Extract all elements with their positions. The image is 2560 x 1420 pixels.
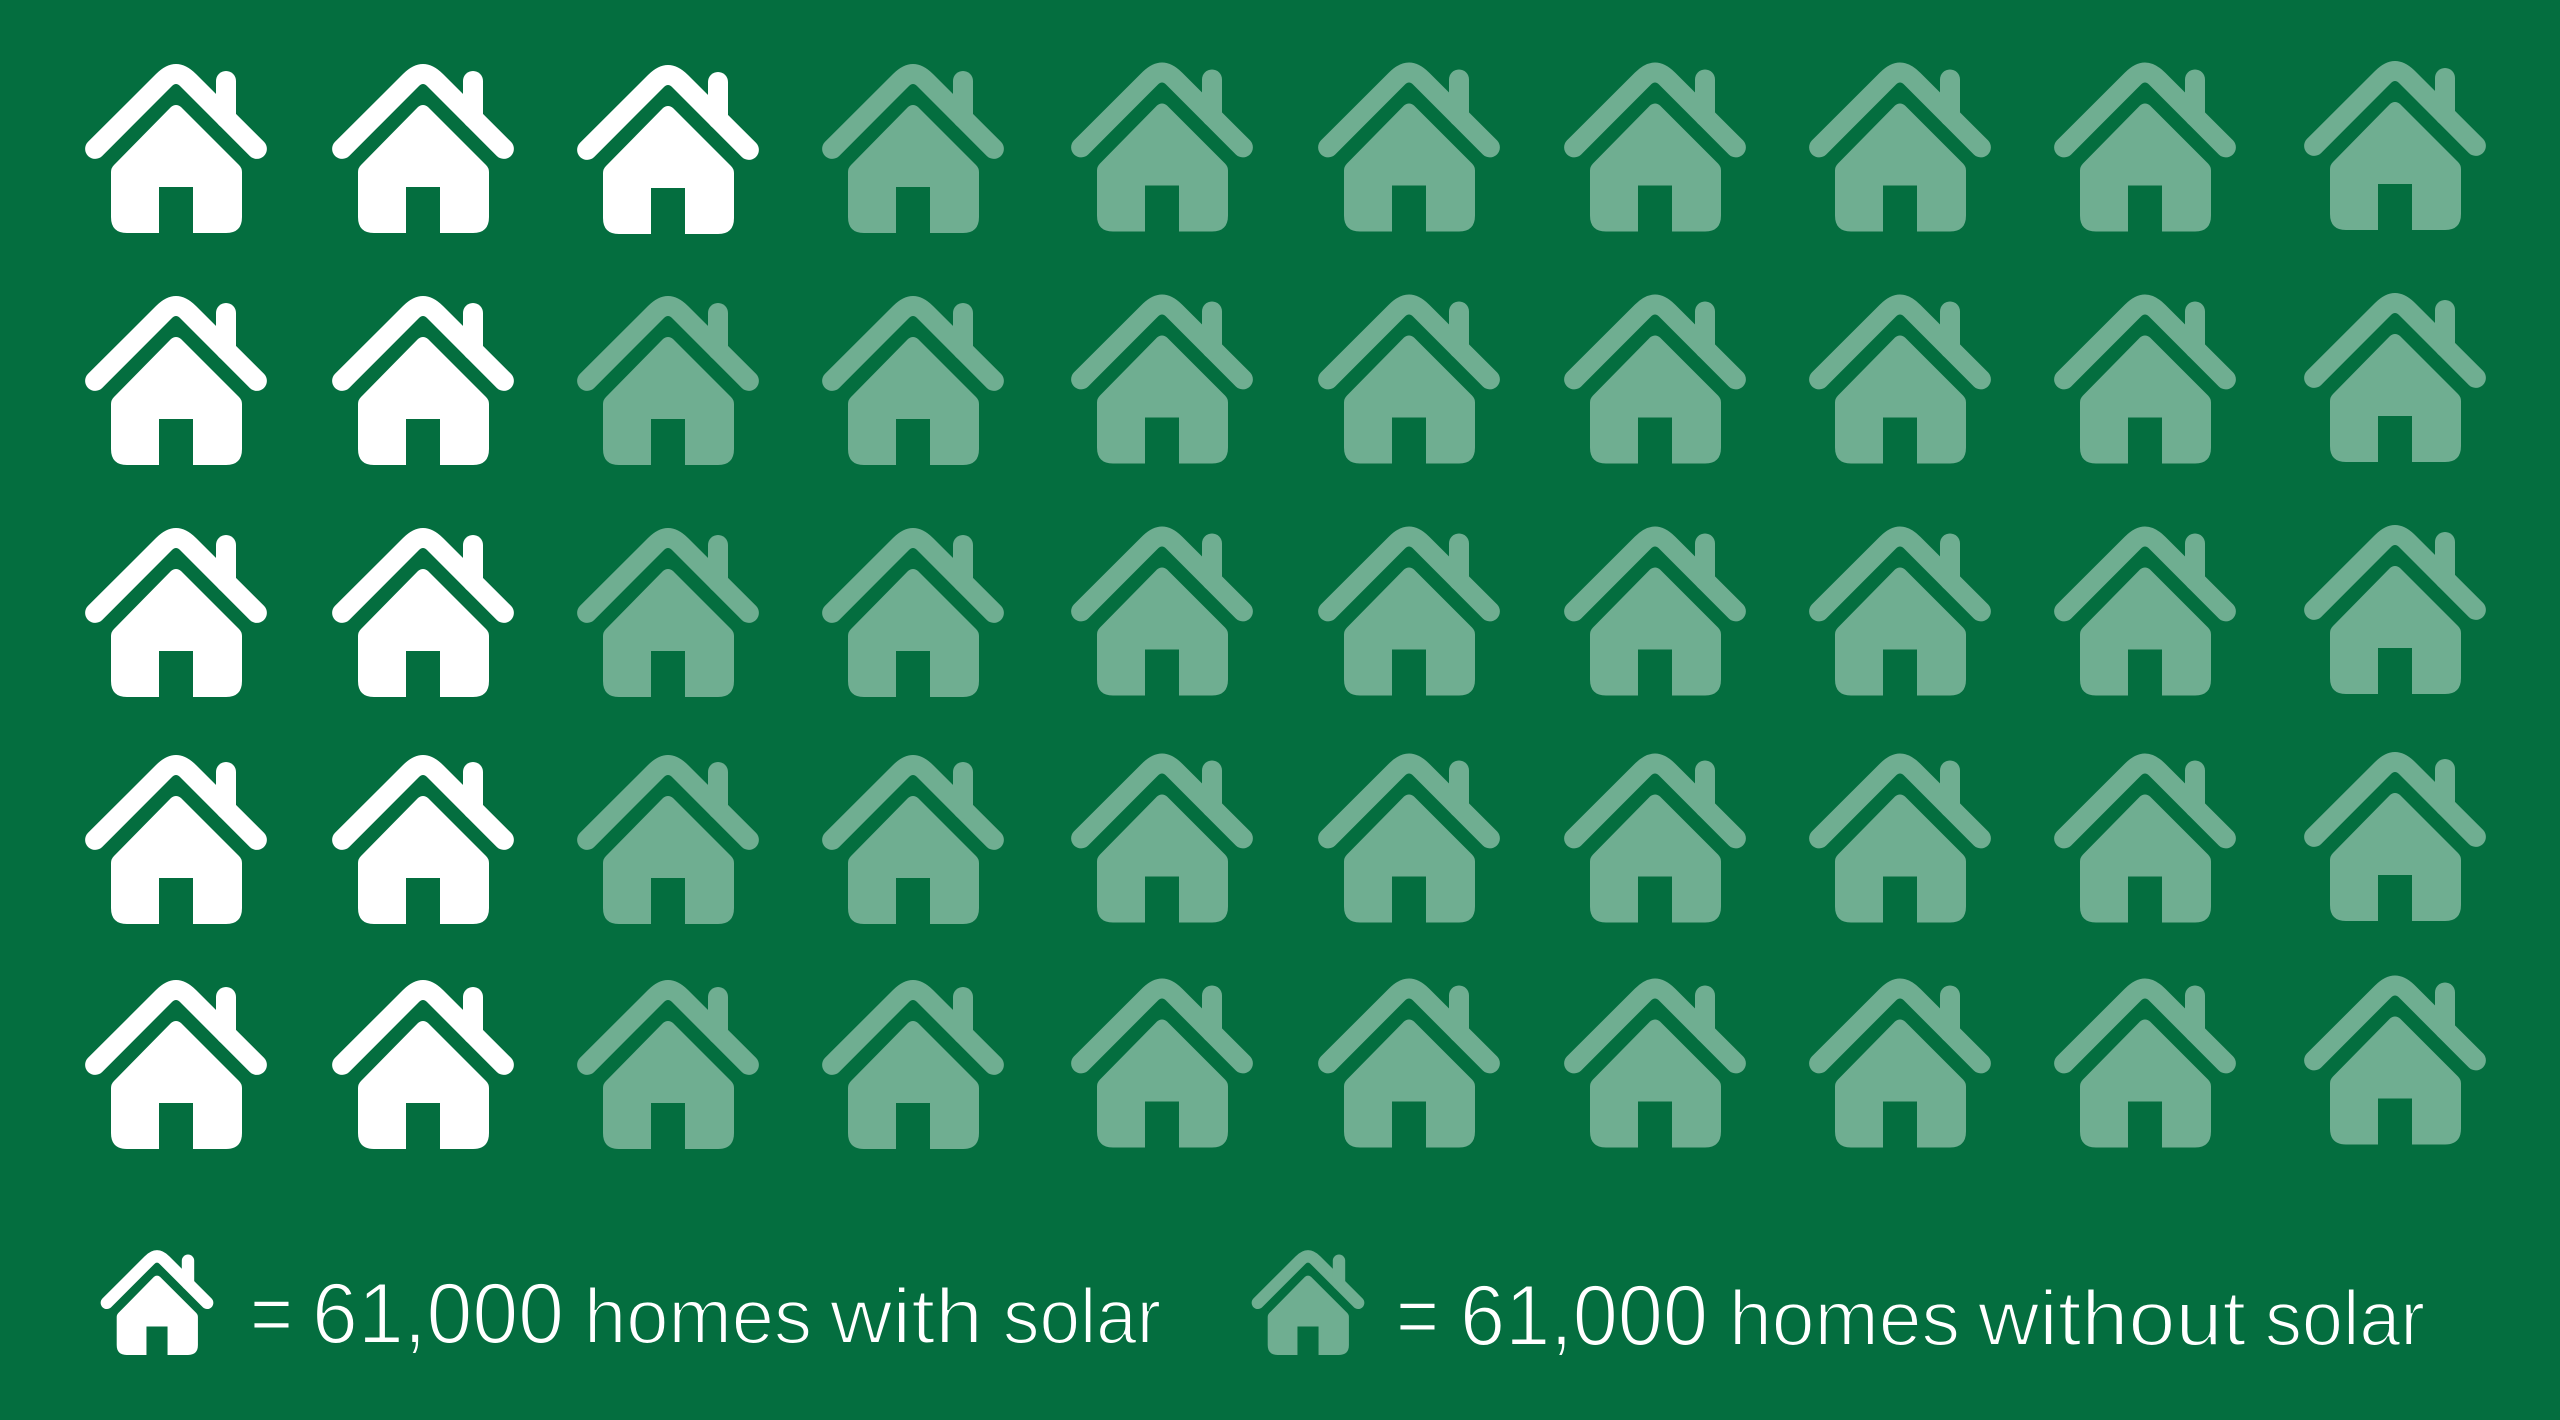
row 5: 2 solar homes, 8 without bbox=[85, 976, 2486, 1149]
legend label: without solar: solar bbox=[2265, 1274, 2425, 1362]
legend label: without solar: homes bbox=[1729, 1274, 1960, 1362]
icon: faded house bbox=[1252, 1250, 1364, 1355]
row 2: 2 solar homes, 8 without bbox=[85, 293, 2486, 465]
row 3: 2 solar homes, 8 without bbox=[85, 525, 2486, 697]
icon: white house bbox=[101, 1250, 213, 1355]
row 4: 2 solar homes, 8 without bbox=[85, 752, 2486, 924]
legend label: with solar: with bbox=[829, 1272, 983, 1360]
legend label: without solar: = bbox=[1396, 1268, 1439, 1364]
legend label: with solar: 61,000 bbox=[312, 1266, 564, 1362]
legend label: with solar bbox=[250, 1266, 1161, 1362]
legend: homes without solar bbox=[1252, 1250, 2425, 1364]
legend label: with solar: homes bbox=[584, 1272, 812, 1360]
legend label: with solar: solar bbox=[1003, 1272, 1161, 1360]
legend label: without solar: without bbox=[1977, 1274, 2246, 1362]
legend label: with solar: = bbox=[250, 1266, 293, 1362]
house grid bbox=[85, 61, 2486, 1149]
legend: homes with solar bbox=[101, 1250, 1161, 1362]
legend label: without solar: 61,000 bbox=[1460, 1268, 1708, 1364]
legend label: without solar bbox=[1396, 1268, 2425, 1364]
row 1: 3 solar homes, 7 without bbox=[85, 61, 2486, 234]
